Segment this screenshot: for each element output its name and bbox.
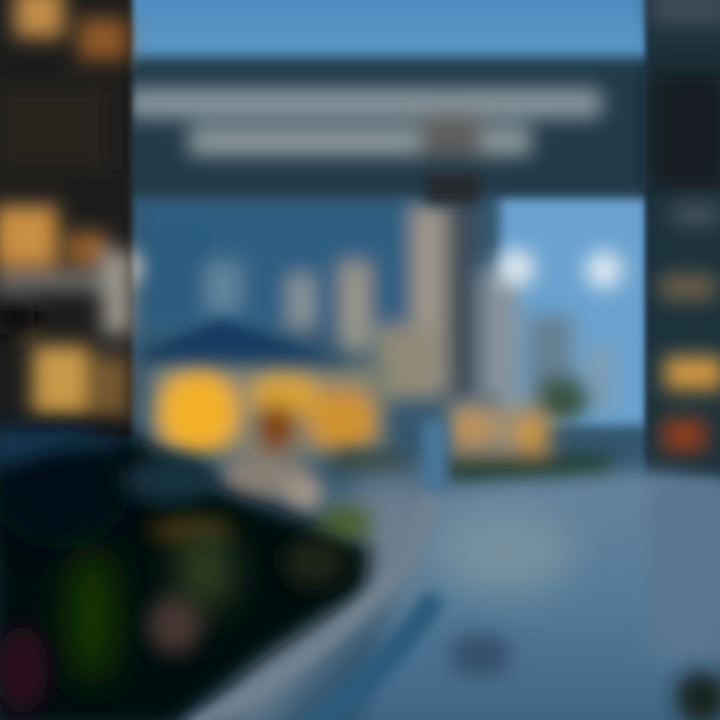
- bottom right foliage: [676, 672, 720, 720]
- sky: [120, 0, 660, 425]
- distant shoreline with warm lights and trees: [335, 378, 610, 484]
- skyline: distant buildings: [140, 200, 616, 410]
- central pavilion with lit windows: [145, 320, 385, 513]
- wet promenade: [200, 420, 720, 720]
- curved railing: [195, 505, 430, 720]
- right building: [645, 0, 720, 480]
- title text, illegible in the reference: [126, 88, 602, 158]
- left building: [0, 0, 132, 440]
- overhead title banner: [128, 56, 653, 204]
- glowing sun spots: [111, 249, 623, 289]
- dark foreground with planting: [0, 425, 373, 720]
